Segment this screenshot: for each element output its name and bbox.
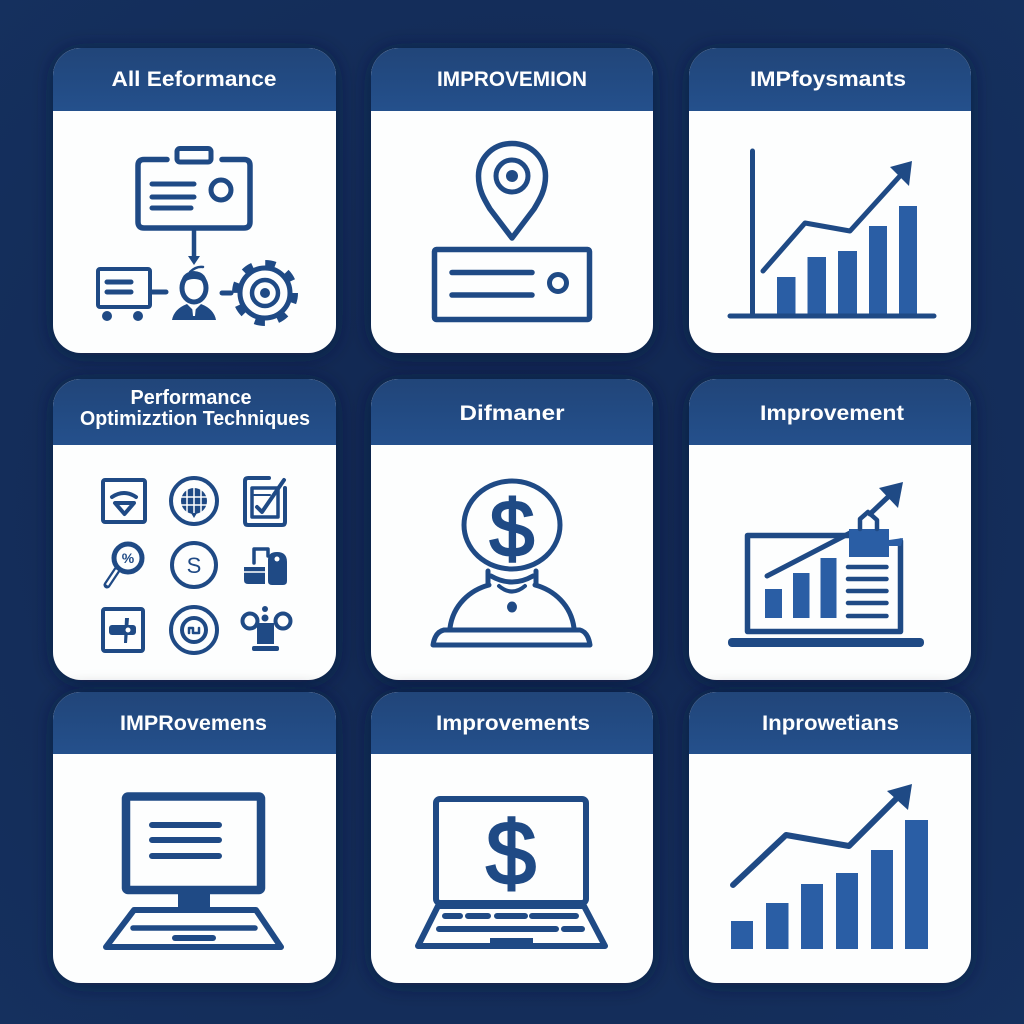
- icon: laptop with dollar: [418, 799, 605, 946]
- header bar: [371, 48, 653, 111]
- header bar: [371, 379, 653, 445]
- header bar: [689, 48, 971, 111]
- icon: globe circle: [171, 478, 217, 524]
- panel: difmaner: [371, 379, 653, 680]
- heading: All Eeformance: [112, 68, 276, 91]
- icon: badge circle: [171, 607, 217, 653]
- icon: podium with rings: [242, 606, 290, 651]
- panel: impfoysmants: [689, 48, 971, 353]
- header bar: [53, 379, 336, 445]
- dollar sign: $: [486, 804, 536, 904]
- icon: wifi square: [103, 480, 145, 522]
- icon: coin s: [172, 543, 216, 587]
- dollar sign: $: [490, 484, 534, 573]
- heading: Inprowetians: [762, 712, 899, 735]
- heading: Improvement: [760, 402, 904, 425]
- heading: IMPRovemens: [120, 712, 267, 735]
- panel: improwetians: [689, 692, 971, 983]
- heading: IMPROVEMION: [437, 68, 587, 91]
- header bar: [689, 379, 971, 445]
- panel: all eeformance: [53, 48, 336, 353]
- panel: improvements laptop: [371, 692, 653, 983]
- icon: square device: [103, 609, 143, 651]
- header bar: [689, 692, 971, 754]
- icon: location pin on card: [434, 144, 590, 320]
- heading: Improvements: [436, 712, 590, 735]
- bar chart with trend arrow: [730, 151, 934, 316]
- heading: IMPfoysmants: [750, 68, 906, 91]
- icon: laptop chart with lock and arrow: [728, 482, 924, 647]
- header bar: [53, 48, 336, 111]
- icon grid: [103, 478, 290, 653]
- heading: Performance: [130, 387, 252, 409]
- icon: desktop computer: [106, 796, 281, 947]
- header bar: [53, 692, 336, 754]
- icon: magnifier percent: [107, 544, 142, 585]
- icon: coin s: S: [187, 553, 201, 578]
- bar chart with trend arrow: [731, 784, 928, 949]
- panel: improvement laptop: [689, 379, 971, 680]
- icon: coins: [244, 549, 287, 585]
- icon: workflow diagram: [98, 148, 294, 322]
- icon: checklist: [245, 478, 285, 525]
- heading: Difmaner: [460, 402, 564, 425]
- panel: performance optimization techniques: [53, 379, 336, 680]
- icon: magnifier percent: %: [122, 550, 135, 566]
- icon: person with dollar head: [433, 481, 590, 645]
- header bar: [371, 692, 653, 754]
- panel: performance optimization techniques: Optimizztion Techniques: [80, 408, 310, 430]
- panel: improvemion: [371, 48, 653, 353]
- panel: improvemens monitor: [53, 692, 336, 983]
